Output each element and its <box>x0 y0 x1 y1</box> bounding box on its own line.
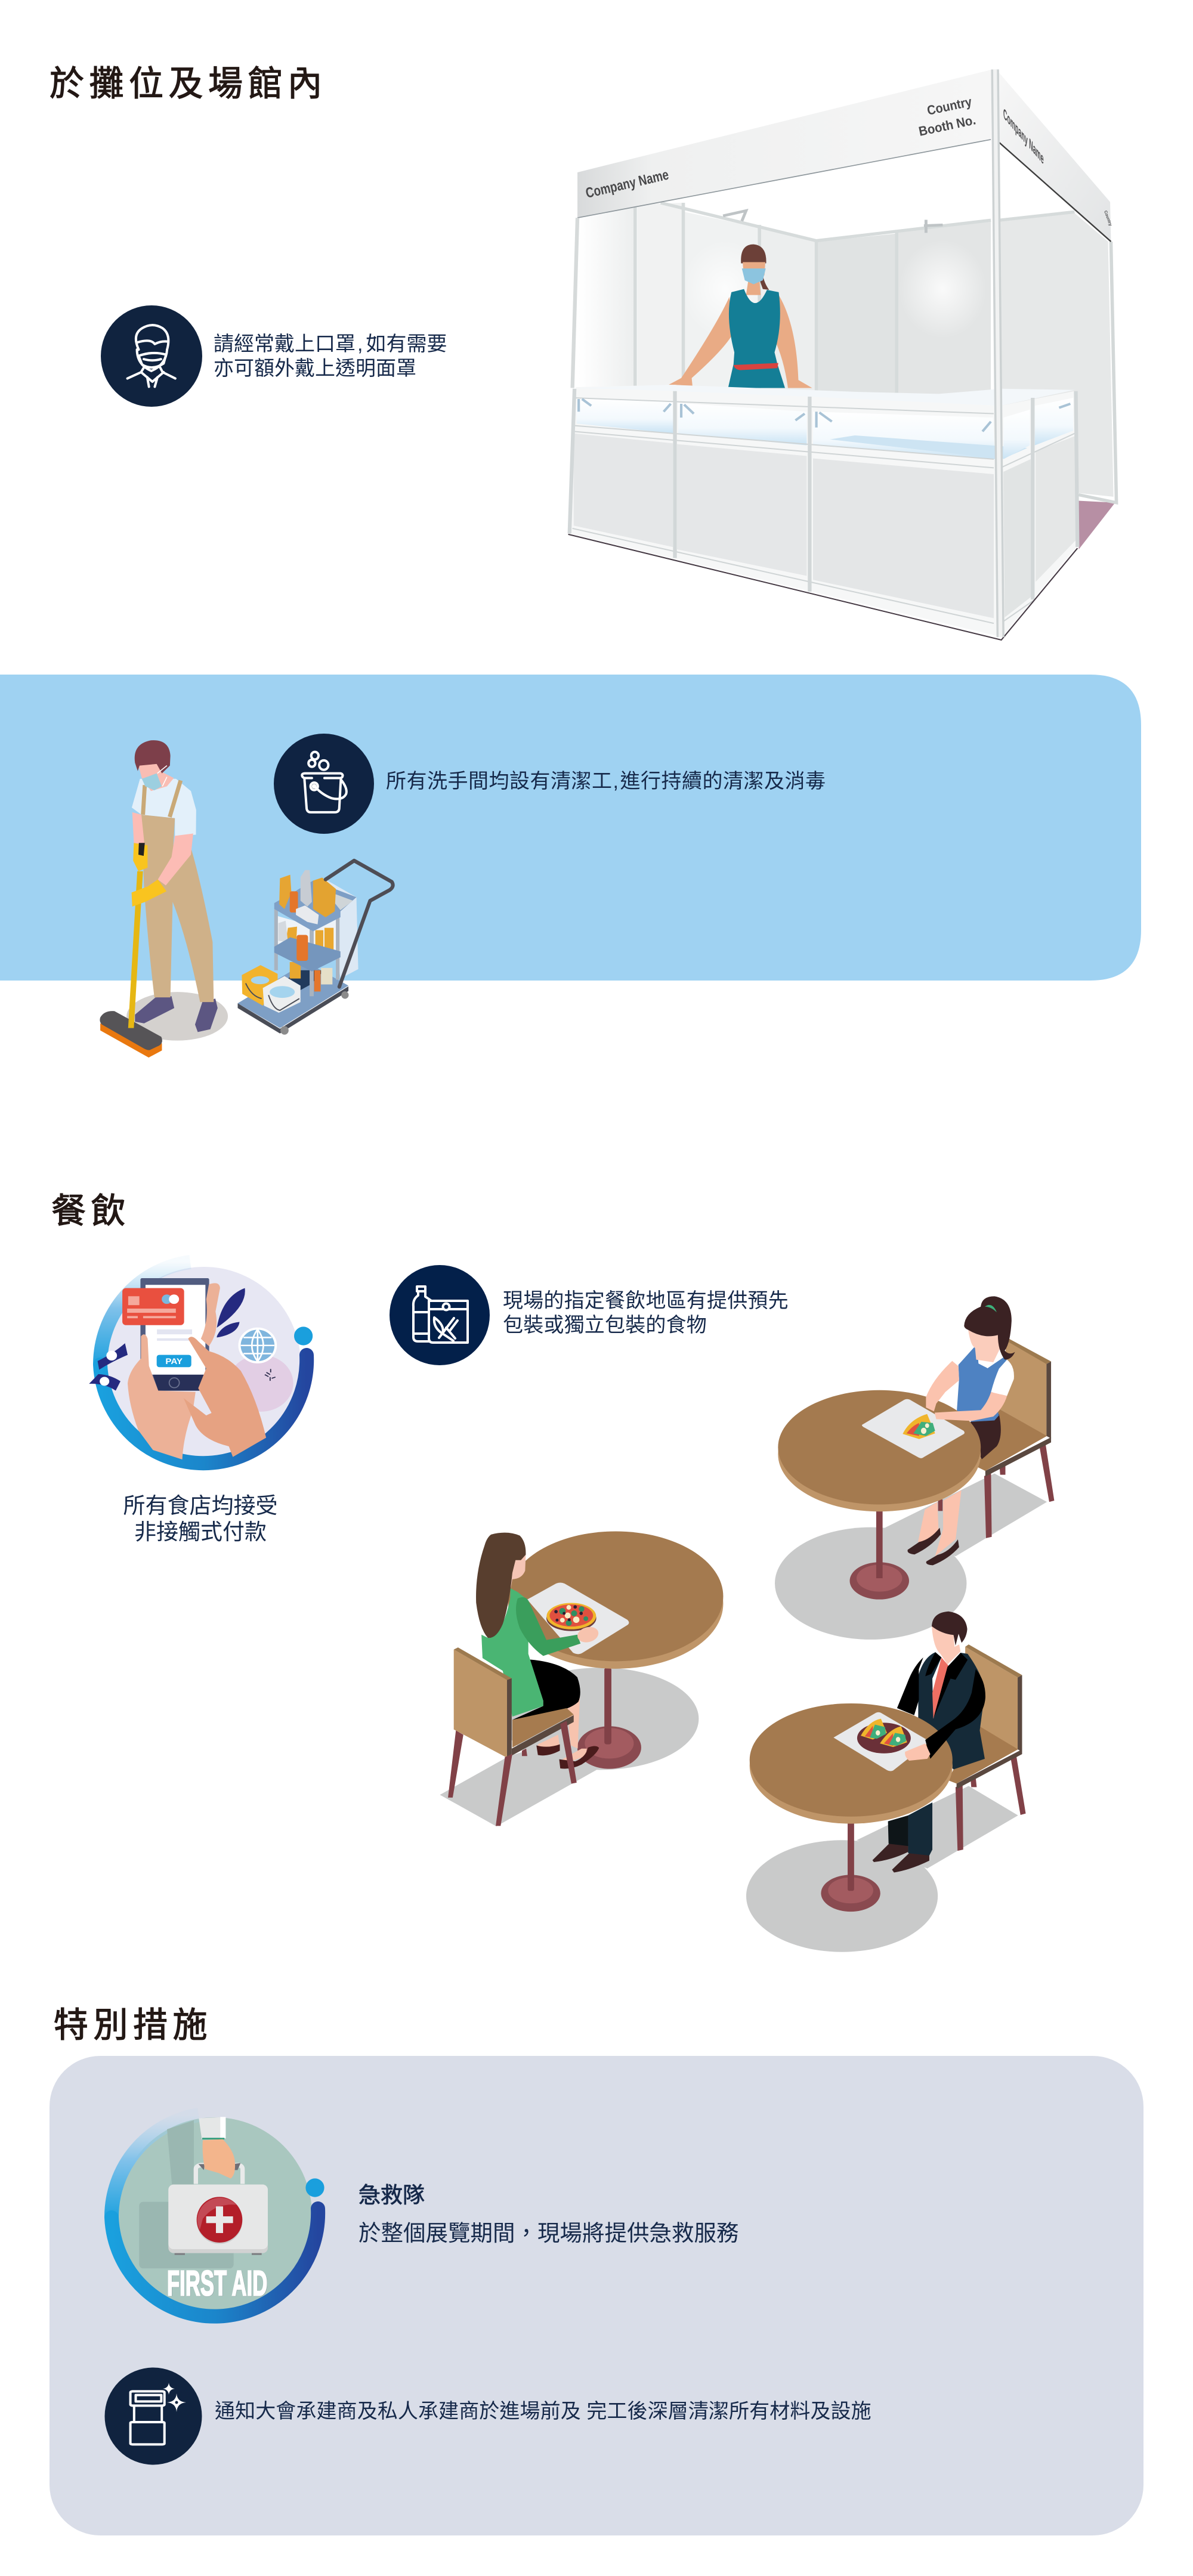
booth fascia labels: Company Name <box>1003 105 1044 168</box>
panel: blue cleaning band <box>0 675 1141 981</box>
body <box>971 1414 1001 1459</box>
text: wear a mask: 請經常戴上口罩,如有需要 <box>214 333 447 355</box>
body <box>512 1659 580 1720</box>
booth floor <box>1078 500 1115 549</box>
booth fascia labels: Country <box>926 94 973 118</box>
chair <box>947 1644 1026 1851</box>
text: washroom cleaning: 所有洗手間均設有清潔工,進行持續的清潔及消毒 <box>386 770 826 793</box>
booth fascia labels: Company Name <box>584 167 670 202</box>
illustration: exhibition booth with masked staff <box>568 69 1117 640</box>
table top <box>778 1390 981 1511</box>
taco <box>903 1414 935 1439</box>
legs <box>538 1696 587 1764</box>
skin <box>132 812 193 885</box>
booth back walls <box>579 203 1117 503</box>
phone <box>140 1278 209 1391</box>
text: first aid team description: 於整個展覽期間，現場將提供急救服務 <box>358 2221 738 2246</box>
illustration: first aid kit: FIRST AID <box>167 2263 267 2303</box>
table top <box>750 1703 953 1824</box>
gloves <box>132 843 166 907</box>
illustration: cleaner with broom <box>100 740 228 1057</box>
face <box>138 764 174 791</box>
credit card <box>122 1288 184 1325</box>
text: wear a mask <box>214 333 447 380</box>
broom head <box>100 1011 162 1057</box>
booth fascia labels <box>584 94 1112 227</box>
counter showcase <box>568 385 1077 640</box>
first aid ring <box>112 2115 199 2218</box>
icon: takeaway food <box>390 1265 490 1365</box>
illustration: first aid kit <box>112 2115 324 2317</box>
illustration: man at lower table <box>746 1612 1026 1952</box>
jacket <box>918 1652 985 1770</box>
payment ring <box>100 1262 190 1365</box>
icon: deep cleaning <box>105 2368 202 2464</box>
pizza <box>546 1603 596 1631</box>
text: cashless payment caption <box>123 1493 278 1544</box>
phone: PAY <box>165 1357 183 1366</box>
chair <box>448 1647 577 1826</box>
heading: catering: 餐飲 <box>51 1192 131 1230</box>
hands <box>201 1283 220 1346</box>
booth fascia labels: Booth No. <box>917 112 977 139</box>
icon: person wearing a mask <box>101 305 202 407</box>
text: deep cleaning notice: 通知大會承建商及私人承建商於進場前及 完工後深層清潔所有材料及設施 <box>215 2400 871 2423</box>
table top <box>508 1531 723 1669</box>
booth fascia labels: Country <box>1103 210 1112 227</box>
mask <box>142 774 162 790</box>
trousers and shoes <box>873 1802 932 1872</box>
overalls <box>141 815 214 1002</box>
chair <box>938 1338 1054 1538</box>
front fascia <box>577 69 992 218</box>
shirt <box>132 779 196 836</box>
booth posts <box>573 69 1000 637</box>
illustration: cleaning cart <box>238 861 393 1035</box>
plate with tacos <box>857 1719 911 1754</box>
right fascia <box>996 69 1111 242</box>
table stem and base <box>821 1822 880 1912</box>
text: packaged food: 現場的指定餐飲地區有提供預先 <box>503 1289 789 1312</box>
table stem and base <box>850 1510 909 1600</box>
text: packaged food <box>503 1289 789 1337</box>
hair <box>135 740 171 774</box>
heading: special measures: 特別措施 <box>54 2006 212 2045</box>
panel: special measures <box>50 2056 1143 2535</box>
upper body <box>905 1612 985 1761</box>
broom handle <box>128 871 143 1028</box>
table stem and base <box>577 1668 641 1769</box>
text: packaged food: 包裝或獨立包裝的食物 <box>503 1314 707 1337</box>
staff member <box>669 245 812 388</box>
text: cashless payment caption: 所有食店均接受 <box>123 1493 278 1518</box>
illustration: contactless payment <box>89 1262 313 1463</box>
illustration: woman at upper table <box>775 1296 1054 1640</box>
shoes <box>135 996 218 1032</box>
legs <box>918 1490 962 1556</box>
text: wear a mask: 亦可額外戴上透明面罩 <box>214 357 416 380</box>
illustration: woman with pizza <box>440 1531 723 1826</box>
icon: bucket <box>274 734 374 834</box>
first aid case <box>168 2185 268 2255</box>
heading: booth and venue: 於攤位及場館內 <box>50 64 327 103</box>
head and arms <box>926 1361 1007 1421</box>
text: cashless payment caption: 非接觸式付款 <box>134 1520 267 1544</box>
text: first aid team title: 急救隊 <box>358 2183 425 2207</box>
